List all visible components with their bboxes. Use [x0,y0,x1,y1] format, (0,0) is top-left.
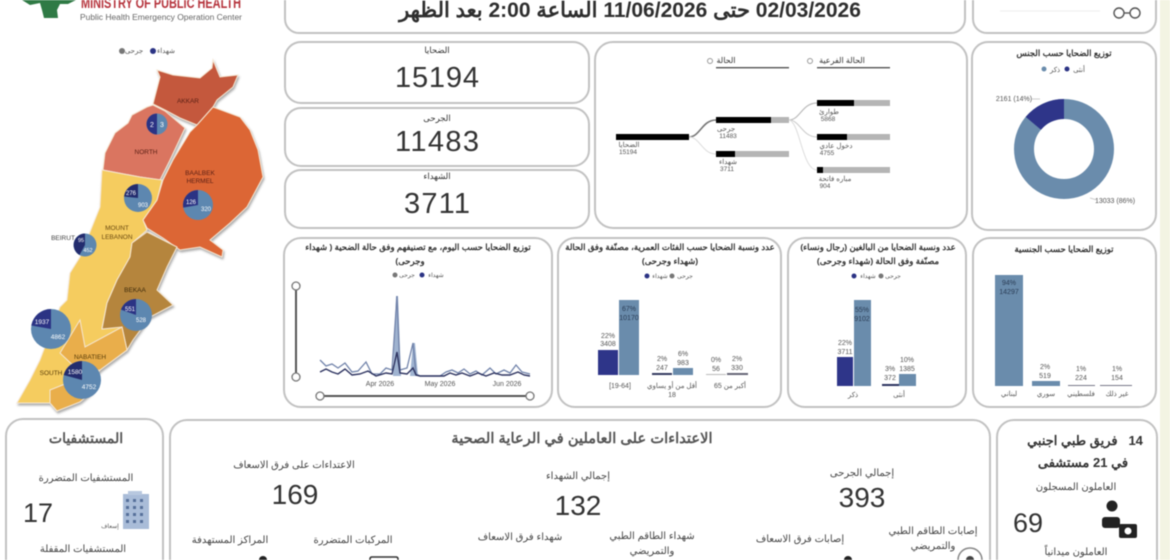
nationality value labels: 94% [1002,280,1016,287]
nationality axis labels: فلسطيني [1067,390,1095,398]
map region labels: NORTH [134,149,158,156]
total wounded stat: إجمالي الجرحى [830,468,894,479]
pie: South: 1580 [68,369,83,376]
pie: Mount Lebanon [124,184,152,212]
age chart legend [644,273,693,280]
donut legend: ذكر [1049,66,1060,74]
adults chart value labels: 3711 [837,349,853,356]
panel: attacks on healthcare workers [170,420,990,560]
ambulance attacks stat: 169 [272,479,318,510]
tree labels: مباره فاتحة [819,175,852,183]
panel: date range header [285,0,965,33]
nationality value labels: 519 [1039,373,1051,380]
nationality value labels: 1% [1076,366,1086,373]
pie: North: 2 [150,122,154,129]
map region labels: HERMEL [186,178,214,185]
panel: hospitals [6,419,163,560]
nationality bars [995,275,1132,386]
adults chart bars [837,300,916,386]
pie: Mount Lebanon coast [31,309,71,349]
age chart value labels: 10170 [619,315,639,322]
sub-stat labels: شهداء الطاقم الطبي [609,531,695,542]
line chart axis labels: May 2026 [425,381,455,388]
total wounded stat [830,468,894,513]
age chart bars [598,300,748,375]
donut chart: 2161 (14%) [996,96,1032,103]
pie: Baalbek Hermel: 126 [186,200,197,206]
total martyrs stat: 132 [555,490,601,521]
line chart legend: جرحى [399,273,415,279]
donut legend [1042,64,1085,74]
pie: Bekaa [120,299,152,331]
age chart axis labels: أقل من أو يساوي [647,380,697,390]
panel: martyrs KPI: الشهداء [423,171,451,182]
pie: Bekaa: 551 [125,307,136,313]
tree labels: 11483 [719,133,737,140]
line chart legend: شهداء [428,272,444,279]
adults chart title: مصنّفة وفق الحالة (شهداء وجرحى) [817,256,940,267]
map region labels: AKKAR [177,98,199,105]
pie: Beirut [74,234,96,256]
sub-stat labels: والتمريضي [911,541,956,552]
nationality value labels: 14297 [999,289,1019,296]
panel: hospitals: 17 [23,498,53,528]
horizontal range slider [316,392,534,400]
adults chart value labels: 1385 [899,366,915,373]
sub-stat labels: إصابات فرق الاسعاف [756,534,844,545]
nationality axis labels: غير ذلك [1106,390,1129,398]
age chart value labels [600,306,743,373]
map legend: شهداء [157,47,175,55]
line chart axis labels: Apr 2026 [366,381,394,388]
donut chart: 13033 (86%) [1095,198,1135,205]
map region labels: BEIRUT [51,235,75,242]
panel: wounded KPI: 11483 [395,126,479,158]
panel: gender donut [972,42,1156,230]
ambulance attacks stat [233,460,355,510]
sub-stat labels: المراكز المستهدفة [192,535,268,546]
pie: Mount Lebanon: 903 [138,203,149,209]
tree labels [619,108,852,190]
panel: adults by gender bar chart [788,238,966,407]
nationality value labels: 2% [1040,364,1050,371]
map legend [119,47,175,55]
map region labels: BEKAA [124,287,146,294]
map region labels: LEBANON [101,234,133,241]
pie: Bekaa: 528 [136,318,147,324]
panel: hospitals: المستشفيات المتضررة [39,473,133,484]
line chart title: وجرحى) [395,256,425,267]
adults chart legend [852,273,901,280]
panel: daily line chart [284,238,552,407]
tree labels: دخول عادي [820,142,852,150]
logo: ministry of public health: Public Health Emergency Operation Center [80,13,242,22]
nationality axis labels: لبناني [1001,390,1017,398]
nationality value labels: 224 [1075,375,1087,382]
age chart axis labels: 18 [668,392,676,399]
tree labels: شهداء [719,158,737,166]
nationality value labels [999,280,1123,382]
panel: hospitals: المستشفيات المقفلة [40,544,126,555]
age chart axis labels: [19-64] [609,383,631,390]
adults chart title [800,242,956,267]
panel: age group bar chart [558,238,781,407]
panel: wounded KPI [285,108,589,166]
nationality axis labels: سوري [1037,391,1055,398]
icon: hospital building: إسعاف [101,523,119,530]
age chart value labels: 56 [712,366,720,373]
adults chart value labels: 10% [900,357,914,364]
map regions [17,60,263,411]
age chart value labels: 2% [657,356,667,363]
donut chart [996,96,1135,205]
sub-stat labels [192,526,978,557]
line chart title [305,242,531,267]
pie: North: 3 [160,122,164,129]
tree labels: 5868 [821,116,836,123]
panel: foreign medical teams: في 21 مستشفى [1038,455,1128,471]
sub-stat labels: إصابات الطاقم الطبي [888,526,978,537]
panel: foreign medical teams: العاملون ميدانياً [1044,544,1107,558]
map region labels: BAALBEK [185,170,215,177]
map region labels: MOUNT [105,225,129,232]
adults chart value labels: 3% [885,366,895,373]
age chart value labels: 6% [678,351,688,358]
tree labels: 904 [820,183,831,190]
panel: filter with slider icon [973,0,1156,33]
nationality value labels: 154 [1111,375,1123,382]
line chart series [320,296,530,376]
panel: nationality bar chart [973,238,1156,407]
age chart title: (شهداء وجرحى) [642,256,698,267]
panel: martyrs KPI: 3711 [404,188,470,220]
line chart title: توزيع الضحايا حسب اليوم، مع تصنيفهم وفق حالة الضحية ( شهداء [305,242,531,253]
tree bars [616,100,890,173]
adults chart axis labels: أنثى [893,389,905,399]
tree labels: 3711 [720,166,734,173]
age chart legend: شهداء [652,273,668,280]
pie: Mount Lebanon coast: 1937 [35,319,50,326]
tree labels: الضحايا [619,141,639,149]
adults chart title: عدد ونسبة الضحايا من البالغين (رجال ونساء) [800,242,956,253]
panel: hospitals: المستشفيات [49,430,123,446]
line chart axis labels: Jun 2026 [493,381,522,388]
adults chart legend: شهداء [860,273,876,280]
age chart value labels: 330 [731,365,743,372]
sub-stat labels: والتمريضي [630,546,675,557]
adults chart axis labels: ذكر [847,391,858,399]
adults chart value labels: 55% [855,307,869,314]
map legend: جرحى [125,48,143,55]
total wounded stat: 393 [839,482,885,513]
adults chart legend: جرحى [885,274,901,280]
panel: wounded KPI: الجرحى [423,113,451,124]
age chart value labels: 22% [601,333,615,340]
tree headers: الحالة الفرعية [819,56,865,65]
line chart legend [392,272,444,279]
sub-stat labels: المركبات المتضررة [313,535,393,546]
nationality axis labels [1001,390,1129,398]
donut legend: أنثى [1073,64,1085,74]
tree headers: الحالة [716,56,736,65]
adults chart value labels: 372 [884,375,896,382]
adults chart axis labels [847,389,905,399]
total martyrs stat: إجمالي الشهداء [546,471,610,482]
pie: Baalbek Hermel [183,190,213,220]
pie: South [63,361,101,399]
age chart value labels: 247 [656,365,668,372]
logo: ministry of public health [22,0,242,22]
pie: Baalbek Hermel: 320 [201,207,212,213]
tree labels: طوارئ [819,108,839,116]
panel: foreign medical teams: 14 فريق طبي اجنبي [1027,433,1144,449]
pie: Beirut: 452 [83,248,93,254]
adults chart value labels [837,307,915,382]
icons clipped at page bottom [259,548,982,560]
icon: worker and camera [1102,500,1137,538]
panel: gender donut: توزيع الضحايا حسب الجنس [1016,48,1112,59]
tree labels: 15194 [619,149,637,156]
map region labels: SOUTH [40,370,63,377]
panel: decomposition tree [595,42,967,228]
panel: foreign medical teams: 69 [1013,508,1043,538]
pie: Mount Lebanon coast: 4862 [51,334,66,341]
sub-stat labels: شهداء فرق الاسعاف [478,532,562,543]
tree headers [708,56,890,68]
pie: Beirut: 95 [78,238,84,244]
panel: total casualties KPI: الضحايا [424,45,450,55]
attacks title: الاعتداءات على العاملين في الرعاية الصحية [451,431,713,448]
nationality value labels: 1% [1112,366,1122,373]
tree labels: جرحى [717,126,735,133]
age chart axis labels: أكبر من 65 [714,380,746,390]
panel: total casualties KPI: 15194 [395,62,479,94]
ambulance attacks stat: الاعتداءات على فرق الاسعاف [233,460,355,471]
age chart value labels: 3408 [600,341,616,348]
tree connectors [689,103,817,170]
vertical range slider [292,282,300,381]
panel: nationality bar chart: توزيع الضحايا حسب الجنسية [1014,244,1114,255]
age chart value labels: 0% [711,357,721,364]
pie: South: 4752 [82,384,97,391]
age chart title: عدد ونسبة الضحايا حسب الفئات العمرية، مصنّفة وفق الحالة [565,242,775,253]
panel: total casualties KPI [285,42,589,103]
map region labels [40,98,215,377]
panel: foreign medical teams [997,420,1157,560]
line chart axis labels [366,381,522,388]
map region labels: NABATIEH [74,354,106,361]
panel: foreign medical teams: العاملون المسجلون [1036,482,1116,493]
age chart value labels: 983 [677,360,689,367]
age chart axis labels [609,380,746,399]
tree labels: 4755 [820,150,835,157]
adults chart value labels: 22% [838,340,852,347]
age chart title [565,242,775,267]
icon: hospital building [101,491,149,530]
pie: North [146,114,168,134]
pie: Mount Lebanon: 276 [126,191,137,197]
panel: martyrs KPI [285,170,589,228]
adults chart value labels: 9102 [854,316,870,323]
total martyrs stat [546,471,610,521]
age chart legend: جرحى [677,274,693,280]
age chart value labels: 67% [622,306,636,313]
age chart value labels: 2% [732,356,742,363]
map of Lebanon with pies [17,47,263,411]
